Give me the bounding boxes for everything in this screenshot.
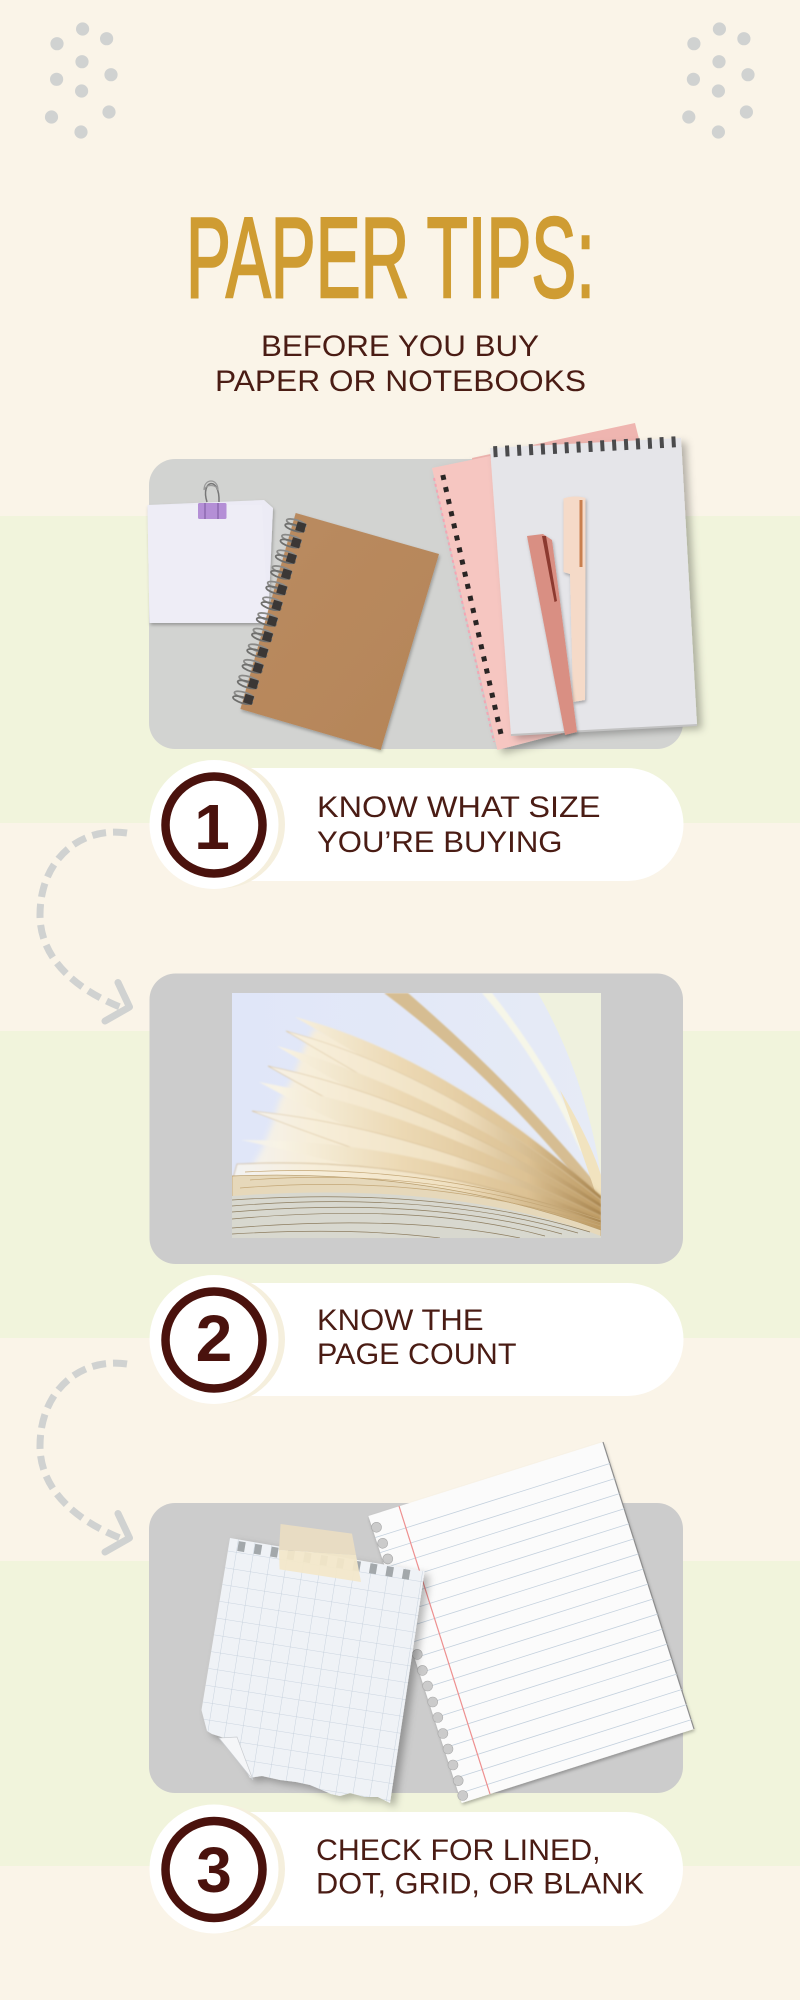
white spiral notepad — [490, 438, 697, 735]
arrow 1 — [40, 832, 130, 1021]
number 3: 3 — [196, 1834, 232, 1906]
text 2: KNOW THE — [317, 1304, 484, 1337]
background band 3 — [0, 1561, 800, 1866]
number 2: 2 — [196, 1301, 232, 1375]
badge crescent 3 — [157, 1805, 285, 1933]
pink notebook — [432, 423, 650, 750]
arrow 2 — [40, 1363, 130, 1552]
subtitle — [215, 330, 586, 398]
text 2: PAGE COUNT — [317, 1338, 516, 1371]
badge crescent 1 — [157, 760, 285, 888]
pill 3 — [240, 1812, 683, 1926]
badge ring 1 — [166, 776, 262, 874]
badge circle 3 — [150, 1804, 278, 1934]
subtitle: BEFORE YOU BUY — [261, 330, 539, 363]
panel: notebooks photo — [148, 423, 697, 750]
badge circle 1 — [150, 760, 278, 889]
panel: book pages photo — [150, 974, 683, 1264]
masking tape — [279, 1524, 361, 1582]
panel: paper types photo — [149, 1442, 694, 1820]
gray panel 2 — [150, 974, 683, 1264]
cream pen — [564, 497, 586, 702]
lined paper sheet — [368, 1442, 694, 1803]
text 1: YOU’RE BUYING — [317, 826, 562, 859]
step 2 label — [150, 1275, 684, 1404]
badge ring 2 — [166, 1292, 262, 1388]
white note stack with clip — [148, 481, 273, 623]
pill 1 — [240, 768, 684, 881]
text 1: KNOW WHAT SIZE — [317, 791, 600, 824]
coral pen — [527, 534, 577, 735]
text 3: CHECK FOR LINED, — [316, 1834, 600, 1867]
photo of fanned pages — [232, 993, 601, 1240]
text 3: DOT, GRID, OR BLANK — [316, 1868, 644, 1900]
kraft spiral notebook — [232, 513, 439, 750]
text 2 — [317, 1304, 516, 1371]
number 1: 1 — [194, 791, 230, 863]
text 3 — [316, 1834, 644, 1900]
background band 1 — [0, 516, 800, 823]
background band 2 — [0, 1031, 800, 1338]
text 1 — [317, 791, 600, 859]
pill 2 — [240, 1283, 684, 1396]
badge crescent 2 — [157, 1276, 285, 1404]
badge circle 2 — [150, 1275, 278, 1404]
step 1 label — [150, 760, 684, 889]
gray panel 3 — [149, 1503, 683, 1793]
grid paper sheet — [202, 1538, 433, 1809]
icon: dots top right — [682, 22, 755, 139]
badge ring 3 — [166, 1821, 262, 1918]
subtitle: PAPER OR NOTEBOOKS — [215, 365, 586, 398]
step 3 label — [150, 1804, 683, 1934]
icon: dots top left — [45, 22, 118, 139]
gray panel 1 — [149, 459, 683, 749]
